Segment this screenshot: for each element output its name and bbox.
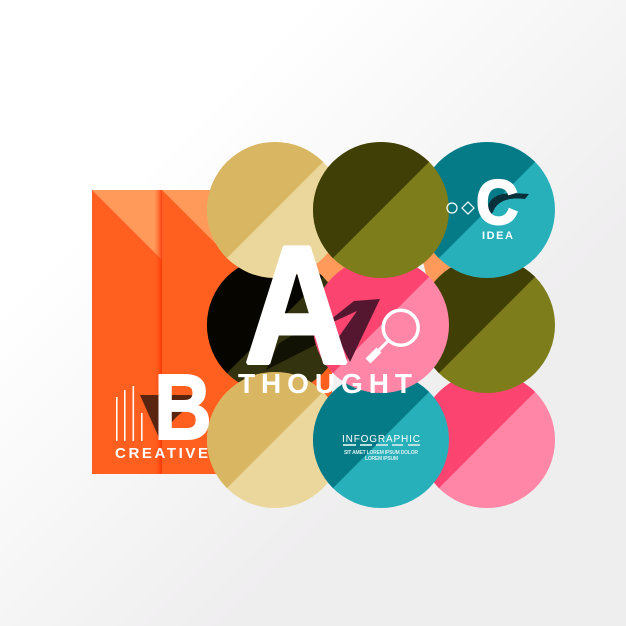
- heading: CREATIVE: CREATIVE: [115, 445, 208, 462]
- text block: INFOGRAPHIC: [342, 434, 420, 462]
- label: IDEA: IDEA: [482, 230, 513, 242]
- text block: INFOGRAPHIC: INFOGRAPHIC: [342, 434, 420, 445]
- circle: tan top left: [207, 142, 343, 278]
- circle: black middle left: [207, 257, 343, 393]
- heading: THOUGHT: THOUGHT: [238, 368, 412, 399]
- icon: small circle and diamond: [447, 202, 474, 214]
- letter B: B: [154, 355, 212, 459]
- circle: teal top right: [419, 142, 555, 278]
- icon: swoosh on C: [488, 193, 529, 216]
- icon: magnifier: [368, 310, 418, 361]
- letter A: A: [244, 211, 350, 399]
- panel: orange folded banner: [92, 190, 450, 474]
- circle: pink middle: [313, 257, 449, 393]
- circle: olive right: [419, 257, 555, 393]
- icon: paper plane on pink circle: [333, 299, 380, 362]
- circle: tan bottom left: [207, 372, 343, 508]
- small bars under heading: [343, 444, 420, 446]
- circle: pink bottom right: [419, 372, 555, 508]
- circle: teal bottom centre: [313, 372, 449, 508]
- text block: INFOGRAPHIC: LOREM IPSUM: [365, 456, 398, 462]
- icon: white bars: [116, 386, 143, 441]
- letter C: C: [476, 167, 518, 237]
- icon: dark triangle behind B: [140, 395, 198, 440]
- circle: olive top centre: [313, 142, 449, 278]
- text block: INFOGRAPHIC: SIT AMET LOREM IPSUM DOLOR: [344, 450, 418, 456]
- plane shadow on black circle: [266, 336, 316, 370]
